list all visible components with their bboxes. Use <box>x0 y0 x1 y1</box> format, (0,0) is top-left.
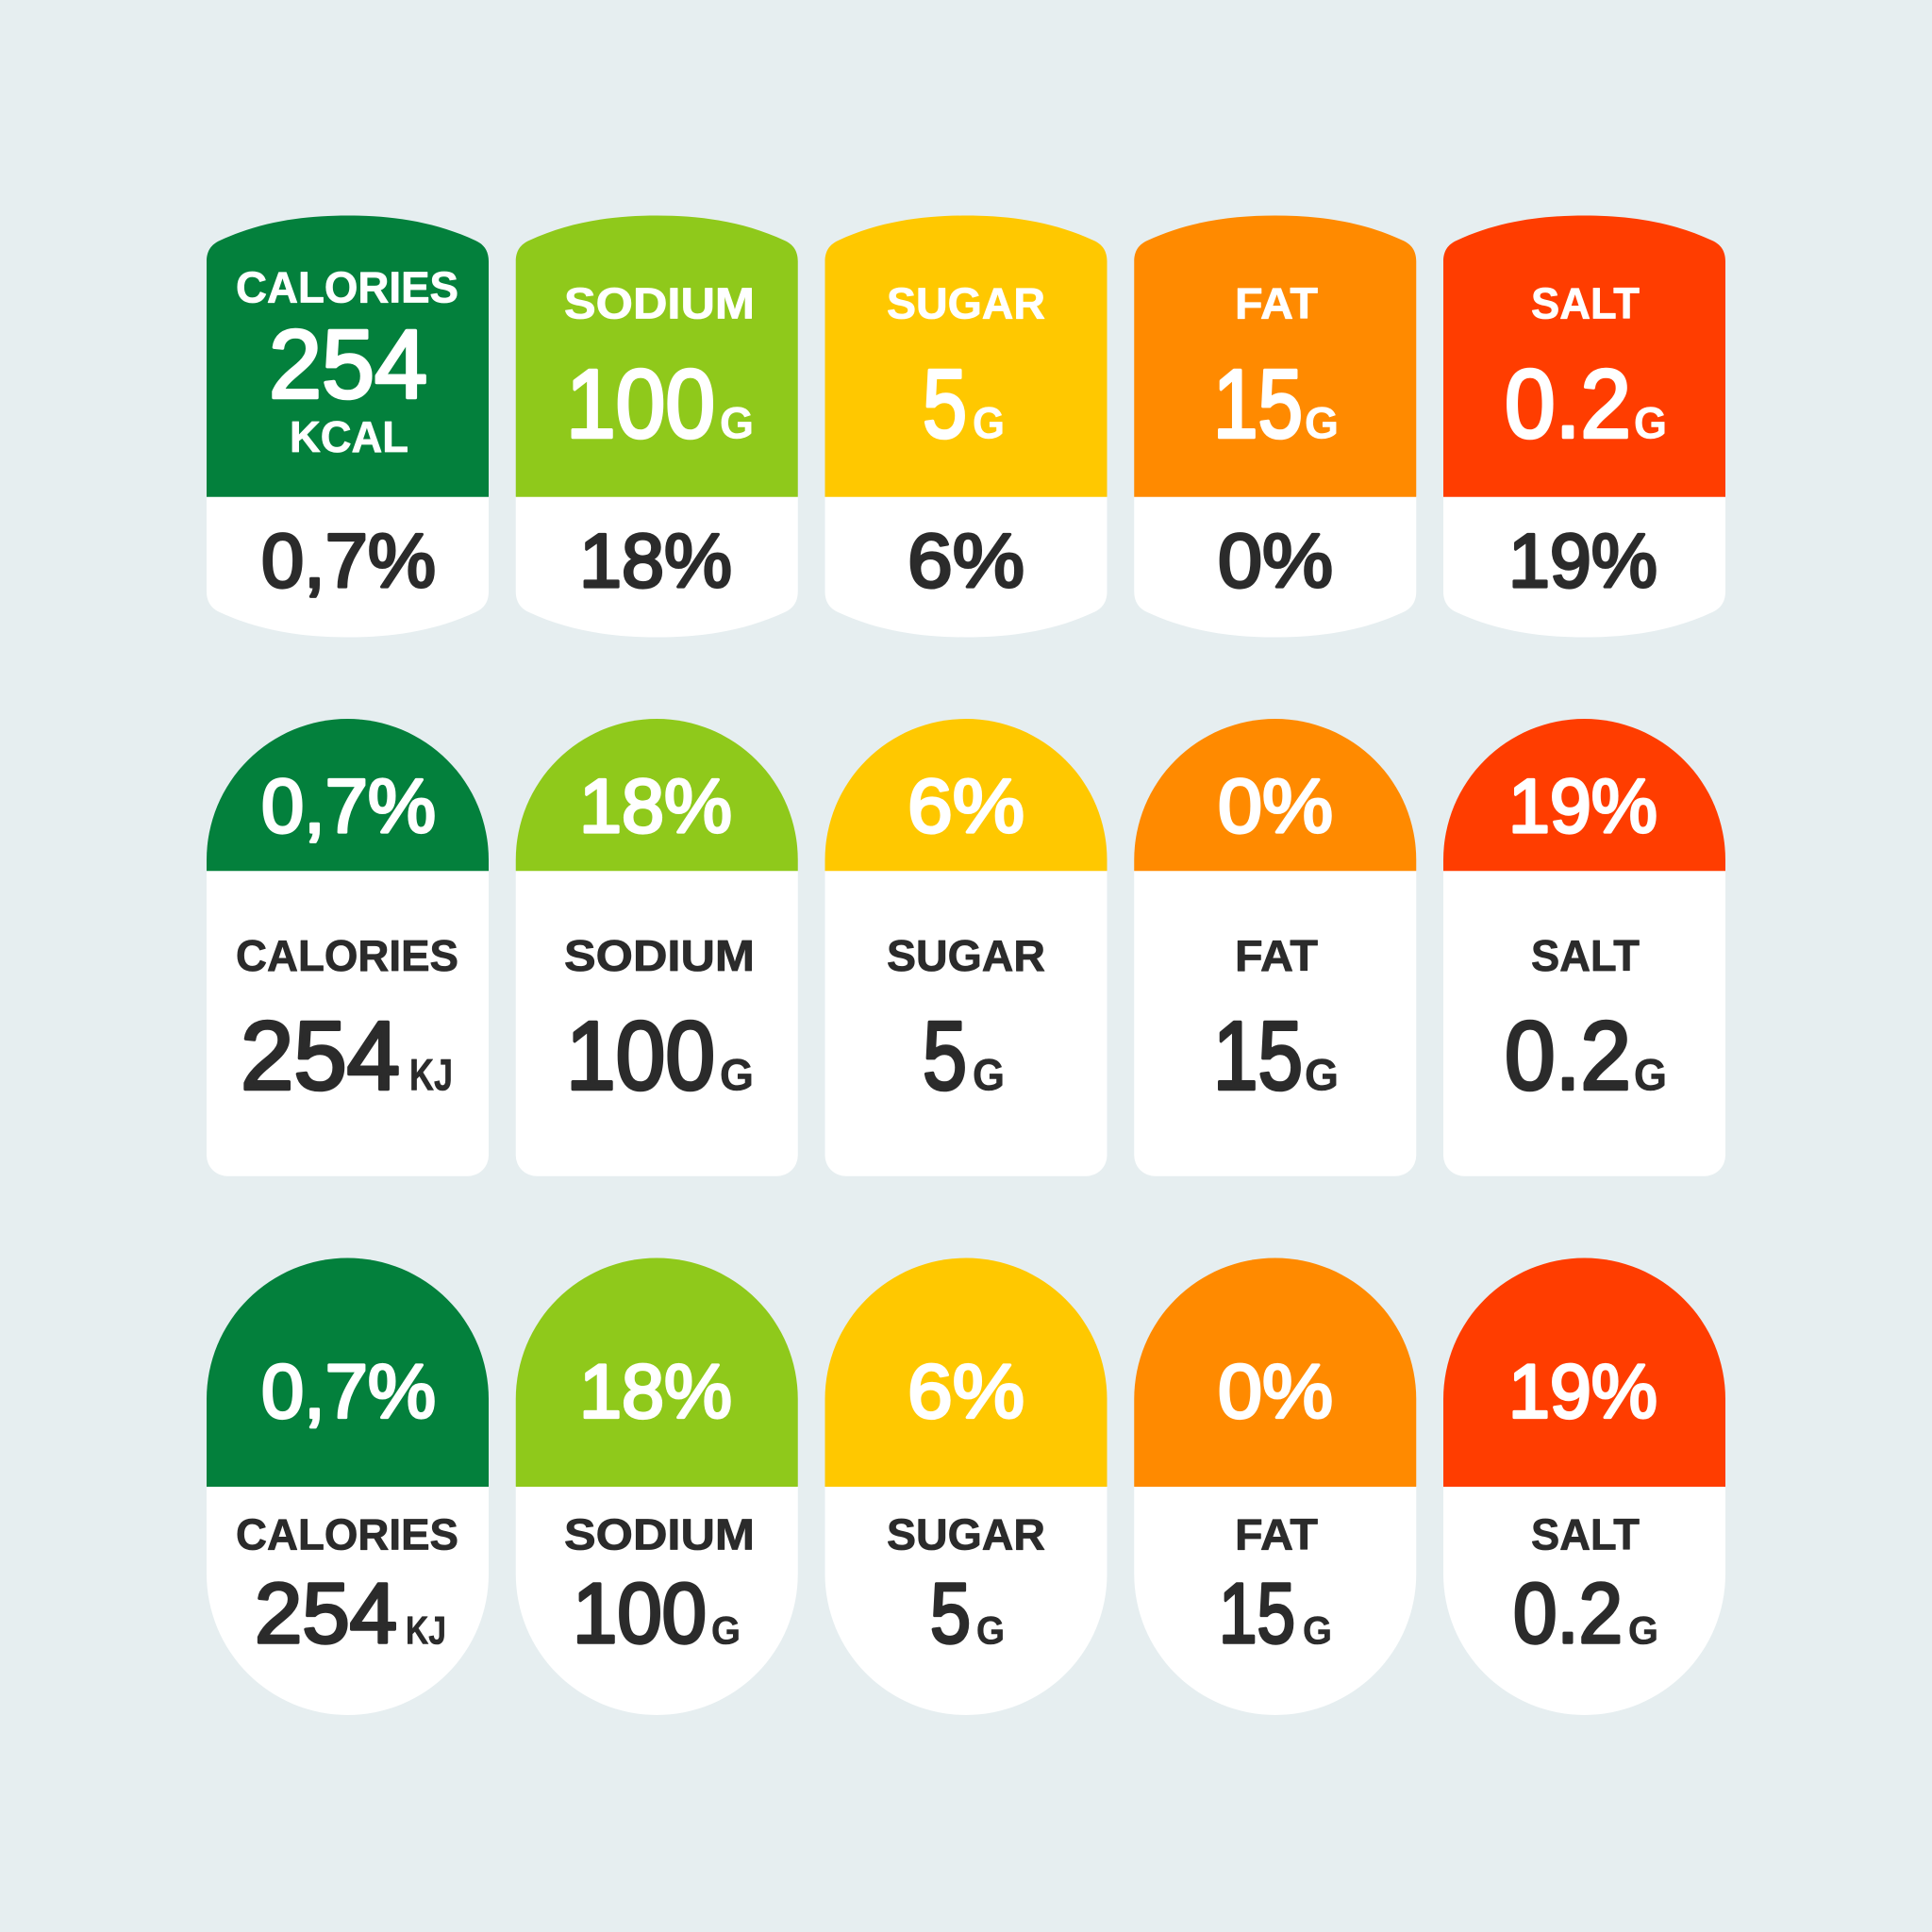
card: salt dome: 19% <box>1508 764 1657 849</box>
card: fat capsule <box>1134 1258 1416 1715</box>
card: sugar barrel <box>824 215 1108 638</box>
card: salt capsule: SALT <box>1531 1509 1640 1558</box>
card: fat barrel: 0% <box>1218 519 1333 604</box>
card: salt barrel <box>1443 215 1725 638</box>
card: fat capsule: 0% <box>1218 1349 1333 1434</box>
card: sugar barrel: G <box>973 398 1005 447</box>
card: fat dome: 15 <box>1213 1001 1303 1109</box>
card: sodium dome: 100 <box>566 1001 715 1109</box>
card: calories barrel: 0,7% <box>261 519 436 604</box>
card: calories capsule: 0,7% <box>261 1349 436 1434</box>
card: salt dome: SALT <box>1531 931 1640 980</box>
card: fat capsule: 15 <box>1219 1567 1295 1661</box>
card: sodium dome <box>516 719 798 1176</box>
card: calories capsule: 254 <box>255 1567 397 1661</box>
card: calories barrel <box>207 215 489 638</box>
card: sugar barrel: 5 <box>923 349 967 458</box>
card: fat capsule: G <box>1303 1607 1332 1652</box>
card: sodium capsule <box>516 1258 798 1715</box>
card: sugar barrel: SUGAR <box>887 278 1045 327</box>
card: salt capsule: 19% <box>1508 1349 1657 1434</box>
card: salt barrel: G <box>1634 398 1667 447</box>
card: sodium capsule: 100 <box>573 1567 707 1661</box>
card: sugar dome <box>824 719 1108 1176</box>
card: calories dome: 0,7% <box>261 764 436 849</box>
card: sodium capsule: G <box>711 1607 741 1652</box>
card: salt capsule: G <box>1628 1607 1658 1652</box>
card: fat barrel: FAT <box>1235 278 1318 327</box>
card: sodium dome: G <box>720 1049 754 1100</box>
card: sodium dome: SODIUM <box>564 931 755 980</box>
card: sugar dome: G <box>973 1049 1005 1100</box>
card: sugar capsule: SUGAR <box>887 1509 1045 1558</box>
card: sodium barrel: 18% <box>579 519 732 604</box>
card: calories barrel: CALORIES <box>236 263 458 312</box>
card: fat dome: 0% <box>1218 764 1333 849</box>
card: salt capsule <box>1443 1258 1725 1715</box>
card: sodium barrel: 100 <box>566 349 715 458</box>
card: sodium capsule: 18% <box>579 1349 732 1434</box>
card: sodium barrel <box>516 215 798 638</box>
card: salt capsule: 0.2 <box>1513 1567 1623 1661</box>
card: salt barrel: SALT <box>1531 278 1640 327</box>
card: calories capsule: KJ <box>406 1607 446 1652</box>
card: calories capsule <box>207 1258 489 1715</box>
card: calories barrel: KCAL <box>290 412 408 461</box>
card: fat barrel <box>1134 215 1416 638</box>
row 2: dome labels <box>207 719 1725 1176</box>
card: calories dome: CALORIES <box>236 931 458 980</box>
card: sugar capsule: 6% <box>908 1349 1024 1434</box>
card: salt dome: 0.2 <box>1505 1001 1631 1109</box>
card: salt dome <box>1443 719 1725 1176</box>
card: salt barrel: 0.2 <box>1505 349 1631 458</box>
card: calories dome <box>207 719 489 1176</box>
card: calories dome: 254 <box>241 1001 400 1109</box>
row 3: capsule labels <box>207 1258 1725 1715</box>
card: sugar capsule <box>824 1258 1108 1715</box>
card: sugar barrel: 6% <box>908 519 1024 604</box>
card: calories dome: KJ <box>409 1049 453 1100</box>
card: salt barrel: 19% <box>1508 519 1657 604</box>
card: sugar dome: 5 <box>923 1001 967 1109</box>
card: sodium dome: 18% <box>579 764 732 849</box>
card: sugar capsule: 5 <box>930 1567 971 1661</box>
card: calories barrel: 254 <box>269 309 427 418</box>
card: sugar dome: 6% <box>908 764 1024 849</box>
card: fat barrel: 15 <box>1213 349 1303 458</box>
card: fat capsule: FAT <box>1235 1509 1318 1558</box>
card: sodium barrel: G <box>720 398 754 447</box>
card: calories capsule: CALORIES <box>236 1509 458 1558</box>
card: fat dome: FAT <box>1235 931 1318 980</box>
row 1: barrel labels <box>207 215 1725 638</box>
card: sugar dome: SUGAR <box>887 931 1045 980</box>
card: fat barrel: G <box>1305 398 1339 447</box>
card: fat dome: G <box>1305 1049 1339 1100</box>
card: sugar capsule: G <box>976 1607 1005 1652</box>
card: fat dome <box>1134 719 1416 1176</box>
card: sodium capsule: SODIUM <box>564 1509 755 1558</box>
card: sodium barrel: SODIUM <box>564 278 755 327</box>
card: salt dome: G <box>1634 1049 1667 1100</box>
